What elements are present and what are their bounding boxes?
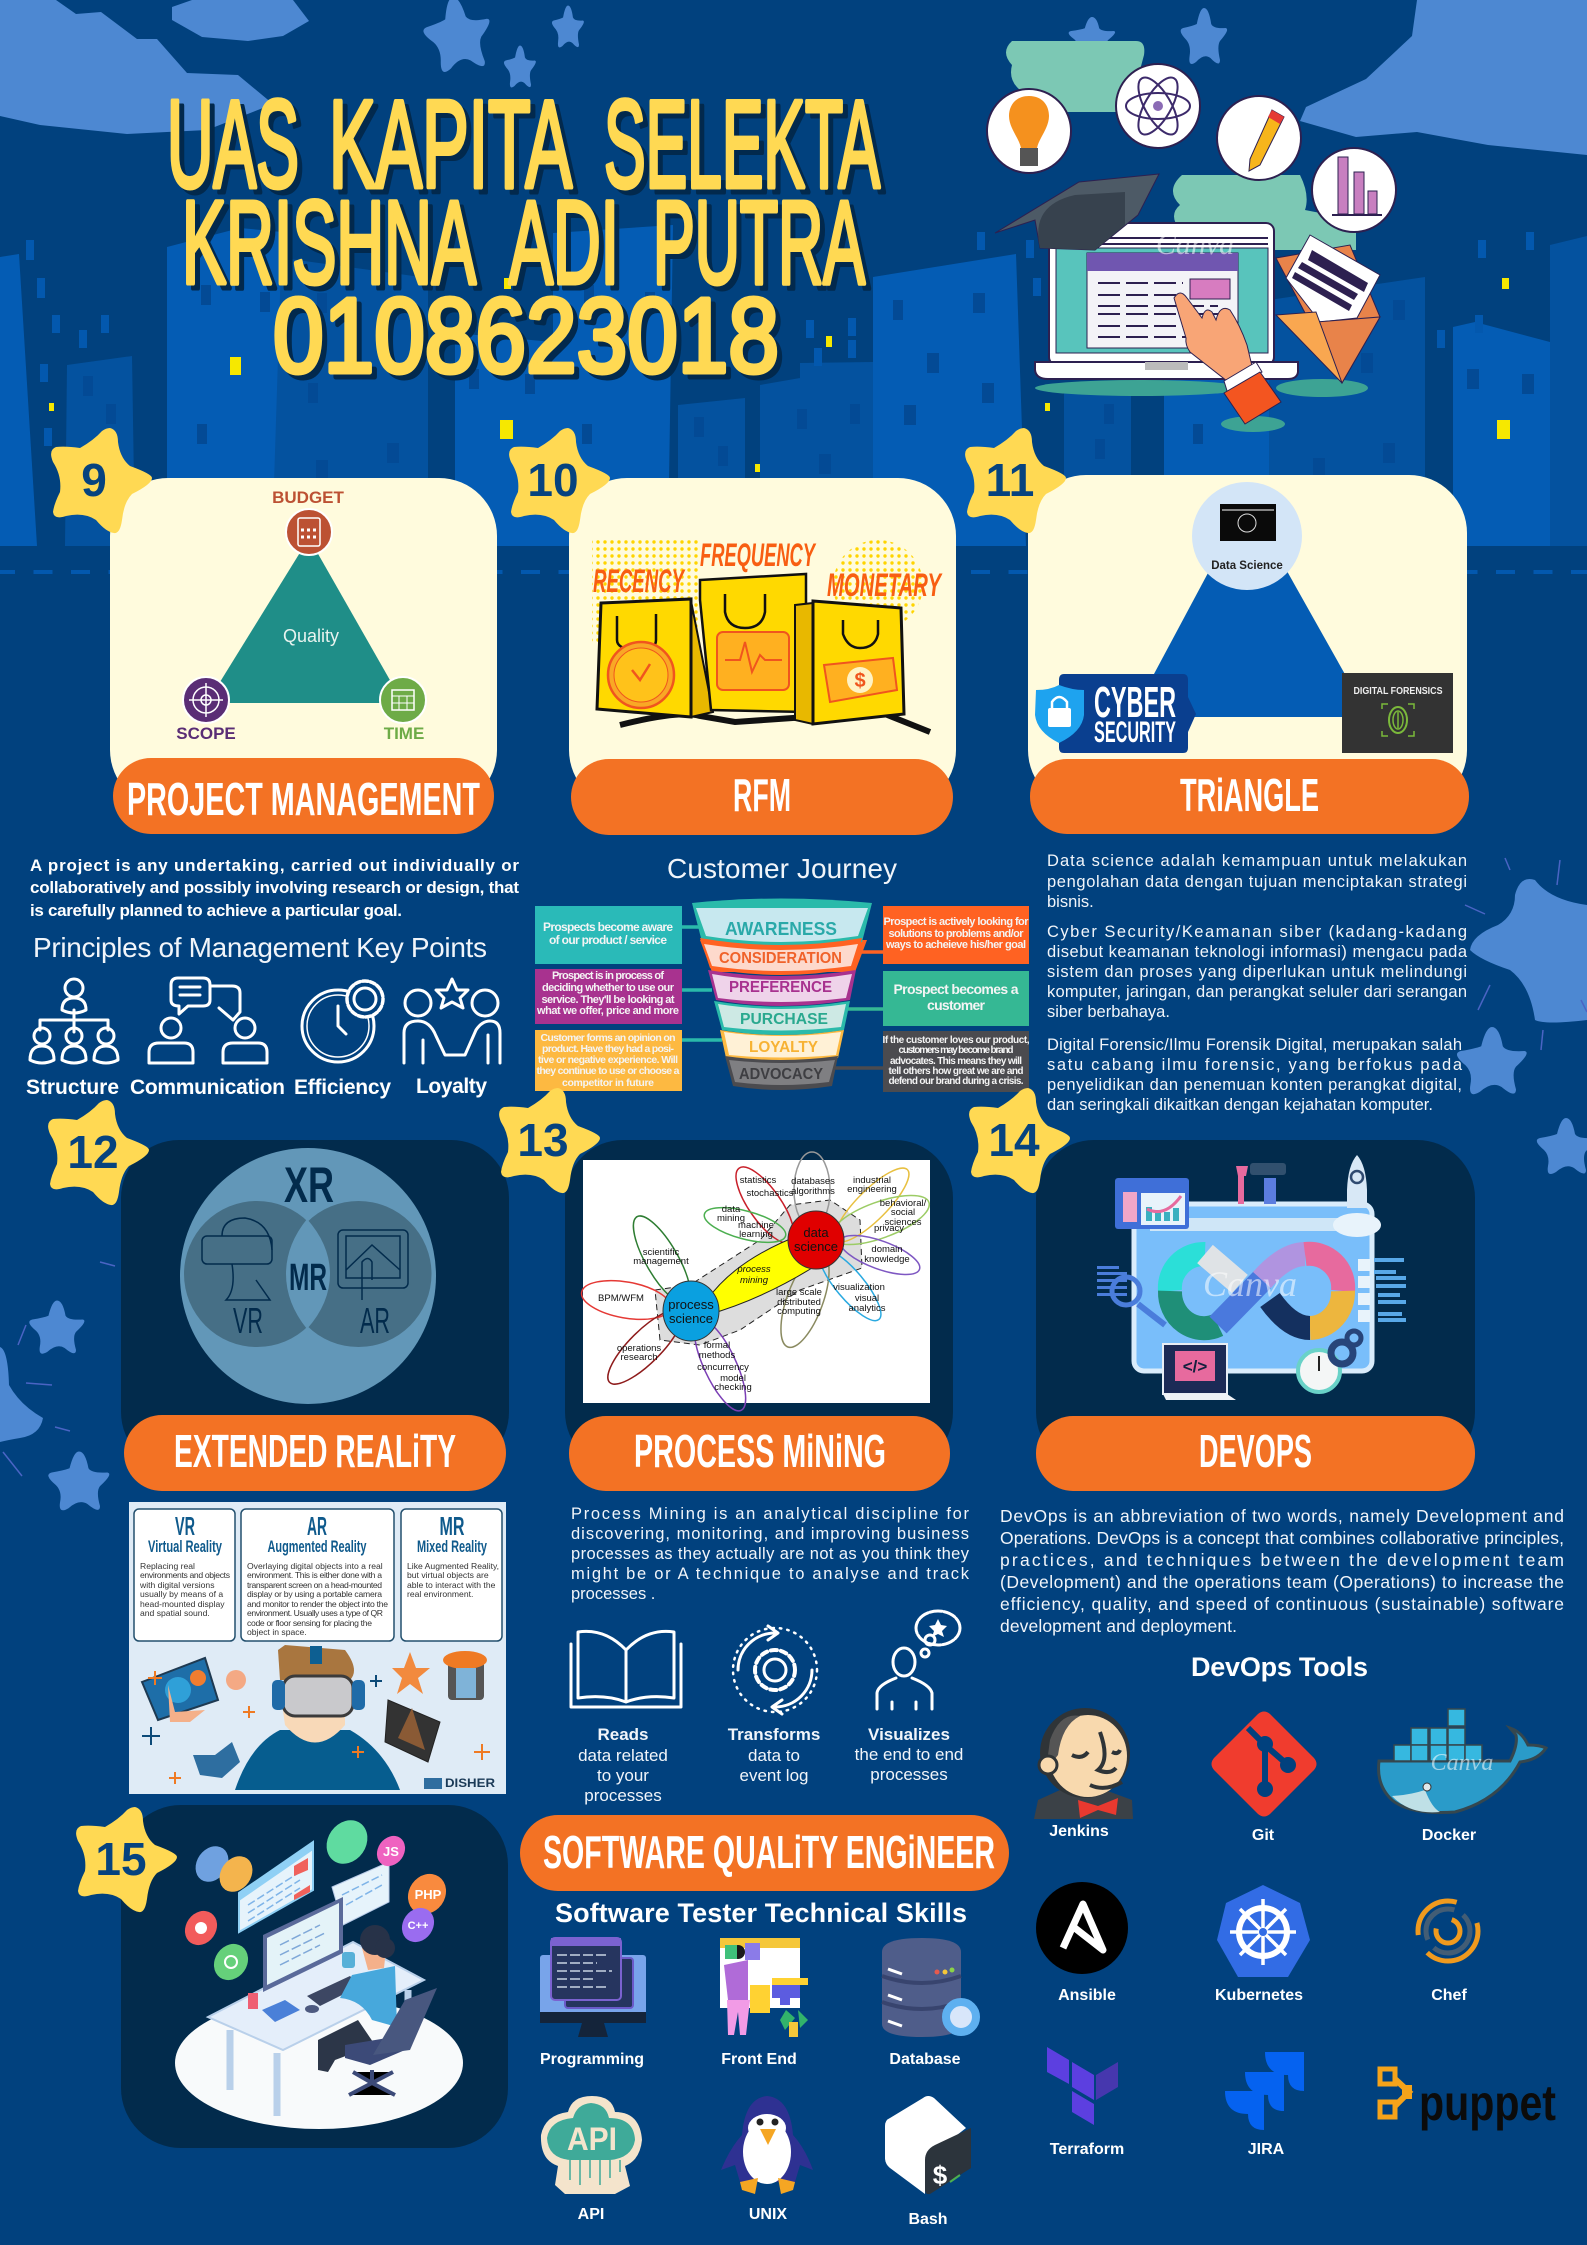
- card: VR: VR: [175, 1511, 195, 1541]
- icon: open book: [571, 1631, 681, 1707]
- funnel callout: consideration: what we offer, price and more: [536, 1005, 679, 1017]
- process mining diagram: databases: [791, 1176, 835, 1187]
- skill: programming: [540, 1938, 646, 2068]
- title: PUTRA: [658, 182, 870, 314]
- funnel callout: purchase: Prospect becomes a: [894, 981, 1019, 997]
- icon: communication: [149, 978, 267, 1063]
- icon: efficiency: [302, 981, 383, 1062]
- customer journey funnel: AWARENESS: [725, 919, 837, 939]
- title: KRISHNA: [182, 177, 476, 309]
- card: AR: [241, 1509, 394, 1641]
- tool: docker: Docker: [1422, 1827, 1476, 1844]
- customer journey funnel: LOYALTY: [749, 1039, 818, 1056]
- skill: front end: [720, 1938, 808, 2068]
- project description text: A project is any undertaking, carried out individually or: [30, 856, 519, 875]
- process mining diagram: scientific: [643, 1247, 679, 1258]
- badge 11: 11: [986, 454, 1034, 506]
- title: 0108623018: [278, 282, 784, 400]
- process mining diagram: knowledge: [864, 1254, 910, 1265]
- badge 14: 14: [988, 1114, 1040, 1166]
- title: [167, 76, 885, 400]
- developer at desk illustration: PHP: [415, 1887, 442, 1902]
- heading: software tester technical skills: Software Tester Technical Skills: [555, 1898, 967, 1928]
- process mining step labels: event log: [740, 1766, 808, 1785]
- card: VR: usually by means of a: [140, 1589, 223, 1599]
- process mining step labels: Transforms: [728, 1725, 820, 1744]
- funnel callout: loyalty: tive or negative experience. Will: [538, 1054, 678, 1066]
- process mining description text: processes .: [571, 1585, 655, 1603]
- badge 10: 10: [527, 454, 579, 506]
- title: ADI: [509, 177, 619, 309]
- badge 15: 15: [95, 1833, 147, 1885]
- devops description text: DevOps is an abbreviation of two words, namely Development and: [1000, 1506, 1564, 1526]
- process mining diagram: model: [720, 1373, 746, 1384]
- software quality engineer banner: SOFTWARE QUALiTY ENGiNEER: [543, 1826, 995, 1878]
- panel 13: process mining: [565, 1140, 953, 1491]
- icon: visualizes thought: [877, 1611, 960, 1709]
- card: AR: environment. Usually uses a type of QR: [247, 1608, 383, 1618]
- xr venn diagram: AR: [360, 1300, 390, 1341]
- funnel callout: advocacy: defend our brand during a crisis.: [888, 1076, 1024, 1087]
- heading: devops tools: DevOps Tools: [1191, 1652, 1368, 1682]
- badge 9: [51, 428, 152, 533]
- card: VR: Replacing real: [140, 1561, 195, 1571]
- tool: git: [1212, 1712, 1316, 1844]
- process mining diagram: [579, 1152, 935, 1417]
- process mining diagram: large scale: [776, 1287, 822, 1298]
- data science node: [1192, 482, 1302, 590]
- digital forensics box: DIGITAL FORENSICS: [1354, 686, 1443, 697]
- funnel callout: loyalty: they continue to use or choose a: [536, 1065, 680, 1077]
- triangle description text: penyelidikan dan penemuan konten perangkat digital,: [1047, 1076, 1462, 1094]
- panel 10: RFM: RFM: [733, 769, 791, 821]
- principle labels: Communication: [130, 1076, 285, 1099]
- funnel callout: advocacy: advocates. This means they will: [890, 1056, 1022, 1067]
- process mining diagram: science: [669, 1311, 713, 1326]
- card: MR: MR: [440, 1511, 465, 1541]
- title: SELEKTA: [609, 81, 885, 219]
- title: ADI: [514, 182, 624, 314]
- customer journey funnel: [535, 898, 1030, 1092]
- title: SELEKTA: [604, 76, 880, 214]
- tool: jenkins: [1034, 1708, 1133, 1840]
- vr headset person illustration: [142, 1645, 495, 1790]
- triangle description text: sistem dan proses yang diperlukan untuk melindungi: [1047, 963, 1467, 981]
- shopping bags illustration: $: [854, 670, 866, 692]
- cyber security badge: CYBER: [1094, 678, 1176, 727]
- developer at desk illustration: JS: [383, 1844, 399, 1859]
- panel 15: software engineer illustration: [121, 1805, 508, 2148]
- process mining diagram: privacy: [874, 1223, 904, 1234]
- card: AR: Overlaying digital objects into a real: [247, 1561, 383, 1571]
- tool: ansible: [1036, 1882, 1128, 2004]
- badge 12: [48, 1100, 149, 1205]
- panel 14: devops: [1036, 1140, 1475, 1491]
- card: AR: environment. This is either done with a: [247, 1570, 382, 1580]
- funnel callout: preference: Prospect is actively looking for: [884, 916, 1029, 928]
- shopping bags illustration: RECENCY: [593, 563, 686, 599]
- card: MR: able to interact with the: [407, 1580, 496, 1590]
- triangle description text: disebut keamanan teknologi informasi) mengacu pada: [1047, 943, 1468, 961]
- process mining diagram: behavioral/: [880, 1198, 927, 1209]
- funnel callout: consideration: service. They'll be looking at: [542, 994, 675, 1006]
- developer at desk illustration: C++: [408, 1920, 428, 1932]
- skill: unix penguin: UNIX: [749, 2206, 787, 2223]
- icon: loyalty: [404, 979, 500, 1063]
- process mining step labels: [578, 1725, 963, 1805]
- tool: terraform: Terraform: [1050, 2141, 1124, 2158]
- process mining diagram: visual: [855, 1293, 879, 1304]
- process mining step labels: Reads: [597, 1725, 649, 1744]
- process mining description text: [571, 1505, 970, 1603]
- icon: structure: [30, 979, 118, 1063]
- process mining diagram: learning: [739, 1229, 773, 1240]
- data science node: Data Science: [1211, 560, 1283, 572]
- tool: puppet: [1380, 2069, 1556, 2131]
- funnel callout: loyalty: [535, 1030, 682, 1091]
- process mining step labels: to your: [597, 1766, 649, 1785]
- devops infinity illustration: [1097, 1155, 1406, 1400]
- customer journey funnel: PREFERENCE: [729, 979, 832, 996]
- principle labels: Efficiency: [294, 1076, 391, 1099]
- funnel callout: preference: [883, 906, 1029, 964]
- shopping bags illustration: MONETARY: [827, 567, 943, 603]
- xr venn diagram: [180, 1148, 436, 1404]
- triangle description text: satu cabang ilmu forensic, yang berfokus pada: [1047, 1056, 1463, 1074]
- process mining description text: discovering, monitoring, and improving business: [571, 1525, 969, 1543]
- developer at desk illustration: [175, 1812, 463, 2129]
- triangle description text: siber berbahaya.: [1047, 1003, 1170, 1021]
- process mining diagram: process: [668, 1297, 714, 1312]
- cyber security badge: SECURITY: [1094, 716, 1176, 749]
- devops description text: practices, and techniques between the development team: [1000, 1550, 1564, 1570]
- card: AR: transparent screen on a head-mounted: [247, 1580, 382, 1590]
- badge 10: [509, 428, 610, 533]
- card: AR: code or floor sensing for placing the: [247, 1618, 372, 1628]
- xr venn diagram: MR: [289, 1257, 327, 1299]
- tool: chef: Chef: [1431, 1987, 1467, 2004]
- funnel callout: loyalty: Customer forms an opinion on: [540, 1032, 676, 1044]
- funnel callout: awareness: [535, 906, 682, 964]
- card: AR: and monitor to render the object into the: [247, 1599, 388, 1609]
- process mining diagram: analytics: [849, 1303, 886, 1314]
- card: VR: Virtual Reality: [148, 1537, 222, 1556]
- tool: jenkins: Jenkins: [1049, 1823, 1109, 1840]
- badge 12: 12: [67, 1126, 119, 1178]
- xr comparison infographic: [129, 1502, 506, 1794]
- process mining diagram: visualization: [833, 1282, 885, 1293]
- funnel callout: consideration: deciding whether to use our: [542, 982, 675, 994]
- triangle diagram: TIME: [384, 724, 424, 743]
- triangle diagram: [176, 488, 426, 743]
- process mining diagram: engineering: [847, 1184, 897, 1195]
- funnel callout: loyalty: product. Have they had a posi-: [542, 1043, 674, 1055]
- xr venn diagram: XR: [284, 1157, 334, 1213]
- triangle description text: Cyber Security/Keamanan siber (kadang-kadang: [1047, 923, 1467, 941]
- skill: programming: Programming: [540, 2051, 644, 2068]
- process mining diagram: computing: [777, 1306, 821, 1317]
- funnel callout: preference: solutions to problems and/or: [888, 928, 1024, 940]
- funnel callout: consideration: Prospect is in process of: [552, 970, 664, 982]
- process mining diagram: checking: [714, 1382, 752, 1393]
- card: MR: Like Augmented Reality,: [407, 1561, 499, 1571]
- funnel callout: consideration: [535, 969, 682, 1024]
- tool: jira: JIRA: [1248, 2141, 1285, 2158]
- skill: bash: $: [933, 2160, 948, 2190]
- card: MR: real environment.: [407, 1589, 473, 1599]
- title: PUTRA: [653, 177, 865, 309]
- badge 11: [965, 428, 1066, 533]
- title: UAS: [172, 81, 304, 219]
- process mining step labels: the end to end: [855, 1745, 963, 1764]
- badge 15: [76, 1807, 177, 1912]
- project description text: collaboratively and possibly involving research or design, that: [30, 878, 519, 897]
- panel 13: process mining: PROCESS MiNiNG: [634, 1425, 886, 1477]
- process mining diagram: machine: [738, 1220, 774, 1231]
- process mining diagram: social: [891, 1207, 915, 1218]
- triangle description text: [1047, 852, 1468, 1114]
- funnel callout: advocacy: [882, 1031, 1030, 1092]
- shopping bags illustration: FREQUENCY: [700, 537, 817, 573]
- tool: docker: [1379, 1709, 1546, 1844]
- card: VR: [134, 1509, 235, 1641]
- panel 11: triangle: [1028, 475, 1469, 834]
- devops infinity illustration: </>: [1183, 1357, 1207, 1376]
- triangle description text: Digital Forensic/Ilmu Forensik Digital, merupakan salah: [1047, 1036, 1462, 1054]
- card: AR: Augmented Reality: [268, 1537, 367, 1556]
- process mining diagram: concurrency: [697, 1362, 749, 1373]
- clouds: [0, 0, 1587, 155]
- card: AR: object in space.: [247, 1627, 307, 1637]
- process mining diagram: domain: [871, 1244, 903, 1255]
- customer journey funnel: CONSIDERATION: [719, 950, 842, 967]
- process mining diagram: science: [794, 1239, 838, 1254]
- icon: transforms gear cycle: [733, 1626, 817, 1714]
- card: VR: and spatial sound.: [140, 1608, 210, 1618]
- skill: api: [541, 2096, 642, 2223]
- process mining description text: Process Mining is an analytical discipline for: [571, 1505, 970, 1523]
- funnel callout: awareness: of our product / service: [549, 933, 667, 947]
- triangle diagram: Quality: [283, 626, 339, 646]
- tool: kubernetes: Kubernetes: [1215, 1987, 1303, 2004]
- tool: kubernetes: [1215, 1885, 1310, 2004]
- panel 12: extended reality: EXTENDED REALiTY: [174, 1425, 456, 1477]
- funnel callout: awareness: Prospects become aware: [543, 920, 673, 934]
- title: 0108623018: [273, 277, 779, 395]
- funnel callout: advocacy: If the customer loves our product,: [882, 1035, 1030, 1046]
- funnel callout: advocacy: customers may become brand: [898, 1045, 1014, 1056]
- title: UAS: [167, 76, 299, 214]
- heading: customer journey: Customer Journey: [667, 853, 897, 884]
- card: MR: [401, 1509, 502, 1641]
- process mining diagram: algorithms: [791, 1186, 835, 1197]
- title: KAPITA: [329, 76, 572, 214]
- vr headset person illustration: DISHER: [445, 1776, 495, 1790]
- shopping bags illustration: [592, 537, 943, 732]
- process mining step labels: data to: [748, 1746, 800, 1765]
- skill: database: Database: [889, 2051, 961, 2068]
- badge 13: [499, 1088, 600, 1193]
- process mining diagram: methods: [699, 1350, 735, 1361]
- data science triangle: [1131, 500, 1369, 717]
- funnel callout: purchase: [883, 971, 1029, 1026]
- devops description text: efficiency, quality, and speed of continuous (sustainable) software: [1000, 1594, 1564, 1614]
- title: KRISHNA: [187, 182, 481, 314]
- process mining diagram: sciences: [885, 1217, 922, 1228]
- tool: jira: [1225, 2052, 1304, 2158]
- principle labels: [26, 1075, 487, 1099]
- funnel callout: advocacy: tell others how great we are and: [888, 1066, 1024, 1077]
- tool: chef: [1418, 1901, 1478, 2004]
- panel 14: devops: DEVOPS: [1199, 1425, 1312, 1477]
- tool: puppet: puppet: [1419, 2075, 1556, 2131]
- triangle description text: pengolahan data dengan tujuan menciptakan strategi: [1047, 873, 1467, 891]
- process mining description text: processes as they actually are not as you think they: [571, 1545, 970, 1563]
- devops infinity illustration: Canva: [1203, 1264, 1297, 1304]
- panel 10: RFM: [569, 478, 956, 835]
- devops description text: [1000, 1506, 1564, 1636]
- process mining diagram: distributed: [777, 1297, 821, 1308]
- card: MR: Mixed Reality: [417, 1537, 487, 1556]
- triangle description text: bisnis.: [1047, 893, 1094, 911]
- skill: bash: Bash: [908, 2211, 948, 2228]
- process mining diagram: data: [722, 1204, 741, 1215]
- card: MR: but virtual objects are: [407, 1570, 489, 1580]
- heading: principles of management: Principles of Management Key Points: [33, 932, 487, 963]
- hero illustration: laptop with icons: [987, 41, 1396, 432]
- process mining diagram: industrial: [853, 1175, 891, 1186]
- funnel callout: purchase: customer: [927, 997, 986, 1013]
- panel 9: project management: PROJECT MANAGEMENT: [127, 773, 480, 825]
- card: AR: display or by using a portable camera: [247, 1589, 382, 1599]
- triangle description text: komputer, jaringan, dan perangkat seluler dari serangan: [1047, 983, 1467, 1001]
- process mining diagram: stochastics: [746, 1188, 794, 1199]
- process mining description text: might be or A technique to analyse and track: [571, 1565, 970, 1583]
- process mining step labels: processes: [584, 1786, 662, 1805]
- funnel callout: preference: ways to acheieve his/her goal: [885, 939, 1026, 951]
- skill: unix penguin: [721, 2096, 813, 2223]
- badge 13: 13: [517, 1114, 569, 1166]
- process mining diagram: management: [633, 1256, 689, 1267]
- skill: bash: [885, 2096, 971, 2228]
- process mining diagram: BPM/WFM: [598, 1293, 644, 1304]
- card: AR: AR: [307, 1511, 327, 1541]
- funnel callout: loyalty: competitor in future: [562, 1077, 654, 1089]
- process mining diagram: formal: [704, 1340, 730, 1351]
- project description text: is carefully planned to achieve a particular goal.: [30, 901, 402, 920]
- skill: api: API: [567, 2121, 617, 2157]
- triangle description text: dan seringkali dikaitkan dengan kejahatan komputer.: [1047, 1096, 1433, 1114]
- cyber security badge: [1035, 674, 1196, 753]
- process mining step labels: Visualizes: [868, 1725, 950, 1744]
- xr venn diagram: VR: [233, 1300, 263, 1341]
- devops description text: Operations. DevOps is a concept that combines collaborative principles,: [1000, 1528, 1564, 1548]
- devops description text: (Development) and the operations team (Operations) to increase the: [1000, 1572, 1564, 1592]
- triangle diagram: SCOPE: [176, 724, 236, 743]
- panel 11: triangle: TRiANGLE: [1180, 769, 1319, 821]
- tool: ansible: Ansible: [1058, 1987, 1116, 2004]
- skill: api: API: [578, 2206, 604, 2223]
- tool: terraform: [1047, 2047, 1124, 2158]
- process mining diagram: research: [621, 1352, 657, 1363]
- triangle diagram: BUDGET: [272, 488, 345, 507]
- software quality engineer banner: [520, 1815, 1009, 1891]
- customer journey funnel: PURCHASE: [740, 1011, 828, 1028]
- skill: database: [882, 1938, 976, 2068]
- card: VR: environments and objects: [140, 1570, 230, 1580]
- badge 14: [969, 1088, 1070, 1193]
- principle labels: Structure: [26, 1076, 119, 1099]
- process mining diagram: mining: [717, 1213, 745, 1224]
- panel 12: extended reality: [121, 1140, 509, 1491]
- process mining step labels: processes: [870, 1765, 948, 1784]
- process mining diagram: statistics: [740, 1175, 776, 1186]
- digital forensics box: [1342, 673, 1453, 753]
- project description text: [30, 856, 519, 920]
- card: VR: head-mounted display: [140, 1599, 225, 1609]
- city skyline background: [0, 225, 1587, 572]
- devops description text: development and deployment.: [1000, 1616, 1237, 1636]
- badge 9: 9: [81, 454, 107, 506]
- decorative stars: [0, 0, 1587, 1510]
- process mining diagram: mining: [740, 1275, 769, 1286]
- process mining diagram: process: [736, 1264, 771, 1275]
- customer journey funnel: ADVOCACY: [739, 1066, 823, 1083]
- principle labels: Loyalty: [416, 1075, 487, 1098]
- tool: docker: Canva: [1431, 1750, 1493, 1776]
- panel 9: project management: [110, 478, 497, 834]
- skill: front end: Front End: [721, 2051, 797, 2068]
- title: KAPITA: [334, 81, 577, 219]
- process mining step labels: data related: [578, 1746, 668, 1765]
- triangle description text: Data science adalah kemampuan untuk melakukan: [1047, 852, 1467, 870]
- tool: git: Git: [1252, 1827, 1275, 1844]
- process mining diagram: operations: [617, 1343, 661, 1354]
- card: VR: with digital versions: [139, 1580, 215, 1590]
- process mining diagram: data: [803, 1225, 829, 1240]
- hero illustration: laptop with icons: Canva: [1156, 228, 1234, 261]
